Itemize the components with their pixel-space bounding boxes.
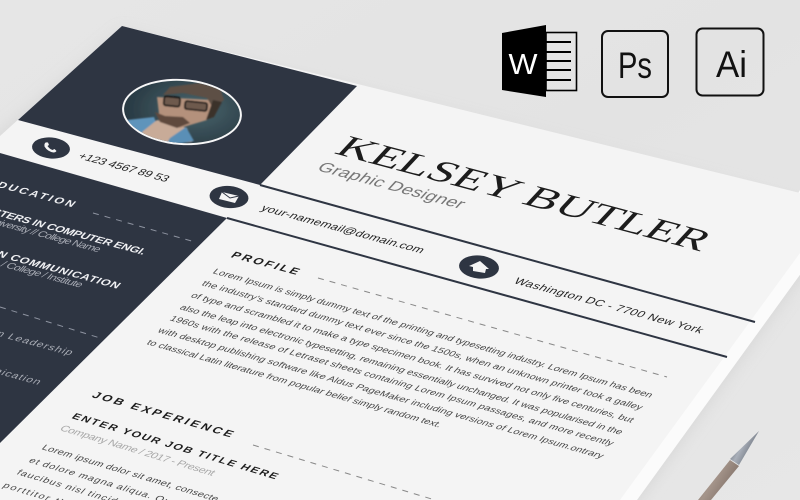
icon: Photoshop: Ps xyxy=(618,45,652,86)
address: Washington DC - 7700 New York xyxy=(511,276,706,336)
sidebar lower dark panel xyxy=(0,153,227,443)
profile text: the industry's standard dummy text ever since the 1500s, when an unknown printer took a galley xyxy=(199,279,645,412)
profile text: to classical Latin literature from popular belief simply random text. xyxy=(144,338,444,430)
job title line: ENTER YOUR JOB TITLE HERE xyxy=(69,412,281,481)
icon: Word: W xyxy=(508,49,538,81)
name heading: KELSEY BUTLER xyxy=(328,129,723,257)
icon: envelope xyxy=(209,184,249,210)
education dashes xyxy=(93,213,195,242)
profile photo xyxy=(122,78,242,146)
icon: Illustrator xyxy=(696,28,764,96)
company line: Company Name / 2017 - Present xyxy=(57,424,218,478)
job title: Graphic Designer xyxy=(313,159,470,212)
profile text: Lorem Ipsum is simply dummy text of the printing and typesetting industry. Lorem Ipsum has been xyxy=(210,267,655,400)
job experience heading: JOB EXPERIENCE xyxy=(89,390,236,439)
icon: Illustrator: Ai xyxy=(716,44,747,85)
pen xyxy=(698,431,759,500)
sidebar dashes xyxy=(0,307,100,338)
profile dashes xyxy=(318,278,667,377)
phone number: +123 4567 89 53 xyxy=(75,151,173,184)
profile text: also the leap into electronic typesetting, remaining essentially unchanged. It was popularised in the xyxy=(177,303,626,437)
paper side edge xyxy=(610,190,800,500)
contact band upper rule xyxy=(260,185,755,322)
school two: / College / Institute xyxy=(0,260,86,290)
icon: house xyxy=(458,254,500,280)
profile text xyxy=(144,267,655,461)
profile text: of type and scrambled it to make a type specimen book. It has survived not only five centuries, but xyxy=(188,291,636,425)
sidebar top dark panel xyxy=(18,26,357,185)
icon: Word xyxy=(502,25,576,97)
job experience dashes xyxy=(253,445,435,500)
email: your-namemail@domain.com xyxy=(258,203,428,256)
icon: Photoshop xyxy=(602,31,668,97)
profile text: with desktop publishing software like Aldus PageMaker including versions of Lorem Ipsum.ontrary xyxy=(154,326,606,461)
profile heading: PROFILE xyxy=(228,250,302,277)
profile text: 1960s with the release of Letraset sheets containing Lorem Ipsum passages, and more recently xyxy=(167,314,616,448)
icon: phone xyxy=(31,136,71,160)
contact band lower rule xyxy=(227,218,727,357)
